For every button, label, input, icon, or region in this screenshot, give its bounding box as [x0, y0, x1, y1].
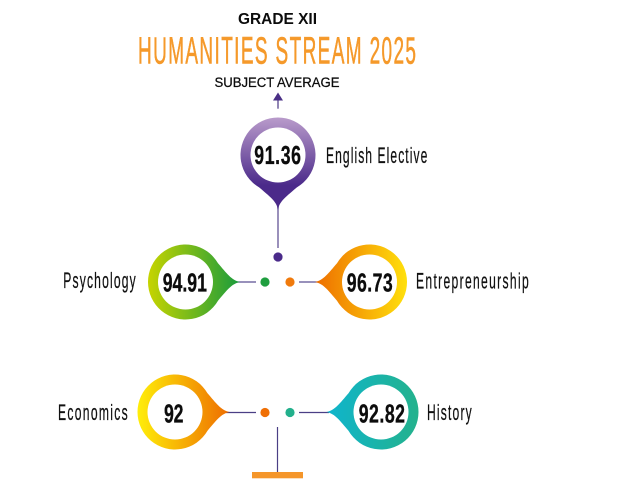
pin shape — [148, 244, 240, 320]
value: 94.91 — [163, 268, 207, 297]
connector line — [236, 281, 256, 283]
marker: History — [285, 374, 472, 450]
marker: Psychology — [63, 244, 270, 320]
arrow: up — [273, 92, 283, 109]
marker: English Elective — [240, 117, 427, 262]
connector line — [226, 412, 256, 414]
value: 96.73 — [347, 268, 393, 297]
grade heading: GRADE XII — [238, 11, 317, 28]
label: History — [427, 400, 472, 425]
label: English Elective — [326, 143, 427, 168]
dot — [285, 277, 295, 287]
value: 92 — [164, 399, 184, 428]
stream heading: HUMANITIES STREAM 2025 — [138, 31, 416, 72]
dot — [260, 408, 270, 417]
connector line — [277, 205, 279, 248]
base stand — [252, 427, 303, 478]
value: 91.36 — [254, 141, 301, 170]
pin shape — [240, 117, 316, 210]
title — [138, 11, 416, 90]
connector line — [299, 281, 319, 283]
label: Economics — [58, 400, 128, 425]
marker: Entrepreneurship — [285, 244, 529, 320]
pin shape — [326, 374, 419, 450]
subtitle: SUBJECT AVERAGE — [214, 75, 340, 90]
label: Entrepreneurship — [416, 269, 529, 293]
dot — [273, 252, 283, 262]
dot — [285, 408, 295, 417]
label: Psychology — [63, 268, 136, 293]
value: 92.82 — [359, 399, 405, 428]
dot — [260, 277, 270, 287]
pin shape — [137, 374, 230, 450]
connector line — [299, 412, 329, 414]
pin shape — [315, 244, 407, 320]
marker: Economics — [58, 374, 270, 450]
